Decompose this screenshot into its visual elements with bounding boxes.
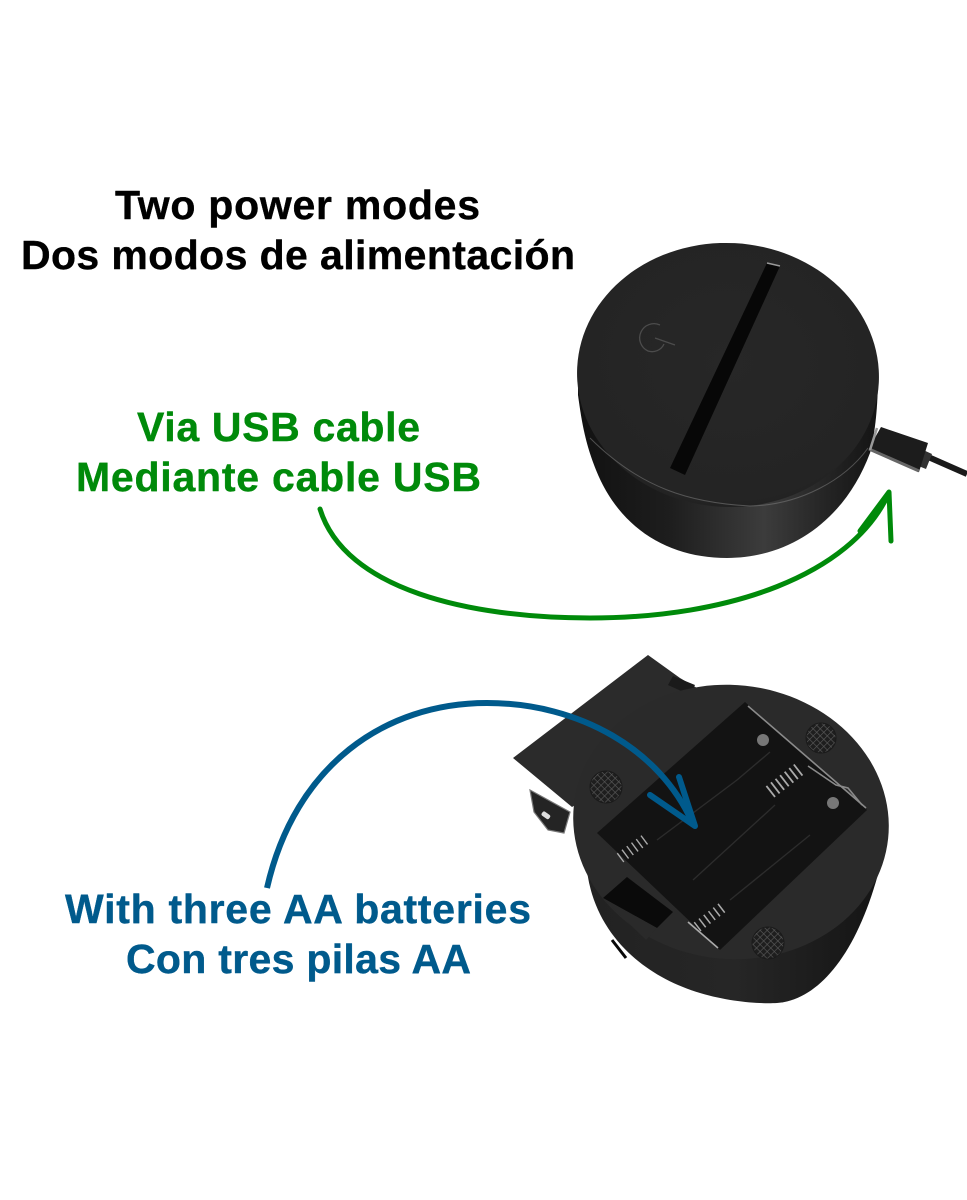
title: Two power modes [115, 182, 480, 228]
springs [620, 767, 802, 948]
batteries label [65, 886, 531, 982]
cylinder body [586, 850, 884, 1003]
arrow: green to USB port [320, 492, 891, 618]
top face [570, 235, 886, 515]
title: Dos modos de alimentación [21, 232, 575, 278]
contact highlights [757, 734, 769, 746]
title [21, 182, 575, 278]
battery well [597, 702, 867, 950]
LED slot [670, 263, 780, 475]
batteries label: With three AA batteries [65, 886, 531, 932]
via USB label: Mediante cable USB [76, 454, 481, 500]
USB cable [868, 427, 967, 474]
via USB label: Via USB cable [137, 404, 420, 450]
sliding cover [513, 655, 697, 807]
product photo: base with USB cable [570, 235, 967, 558]
arrow: blue to battery compartment [267, 703, 695, 888]
rubber feet [590, 723, 836, 959]
bottom face [560, 669, 902, 975]
cylinder body [578, 375, 878, 558]
battery ribs [657, 752, 810, 900]
product photo: battery compartment underside [513, 655, 902, 1003]
top rim contacts [748, 706, 866, 808]
via USB label [76, 404, 481, 500]
batteries label: Con tres pilas AA [126, 936, 471, 982]
metal clip [530, 790, 570, 833]
side pocket [603, 877, 673, 928]
icon: power button [640, 324, 675, 352]
